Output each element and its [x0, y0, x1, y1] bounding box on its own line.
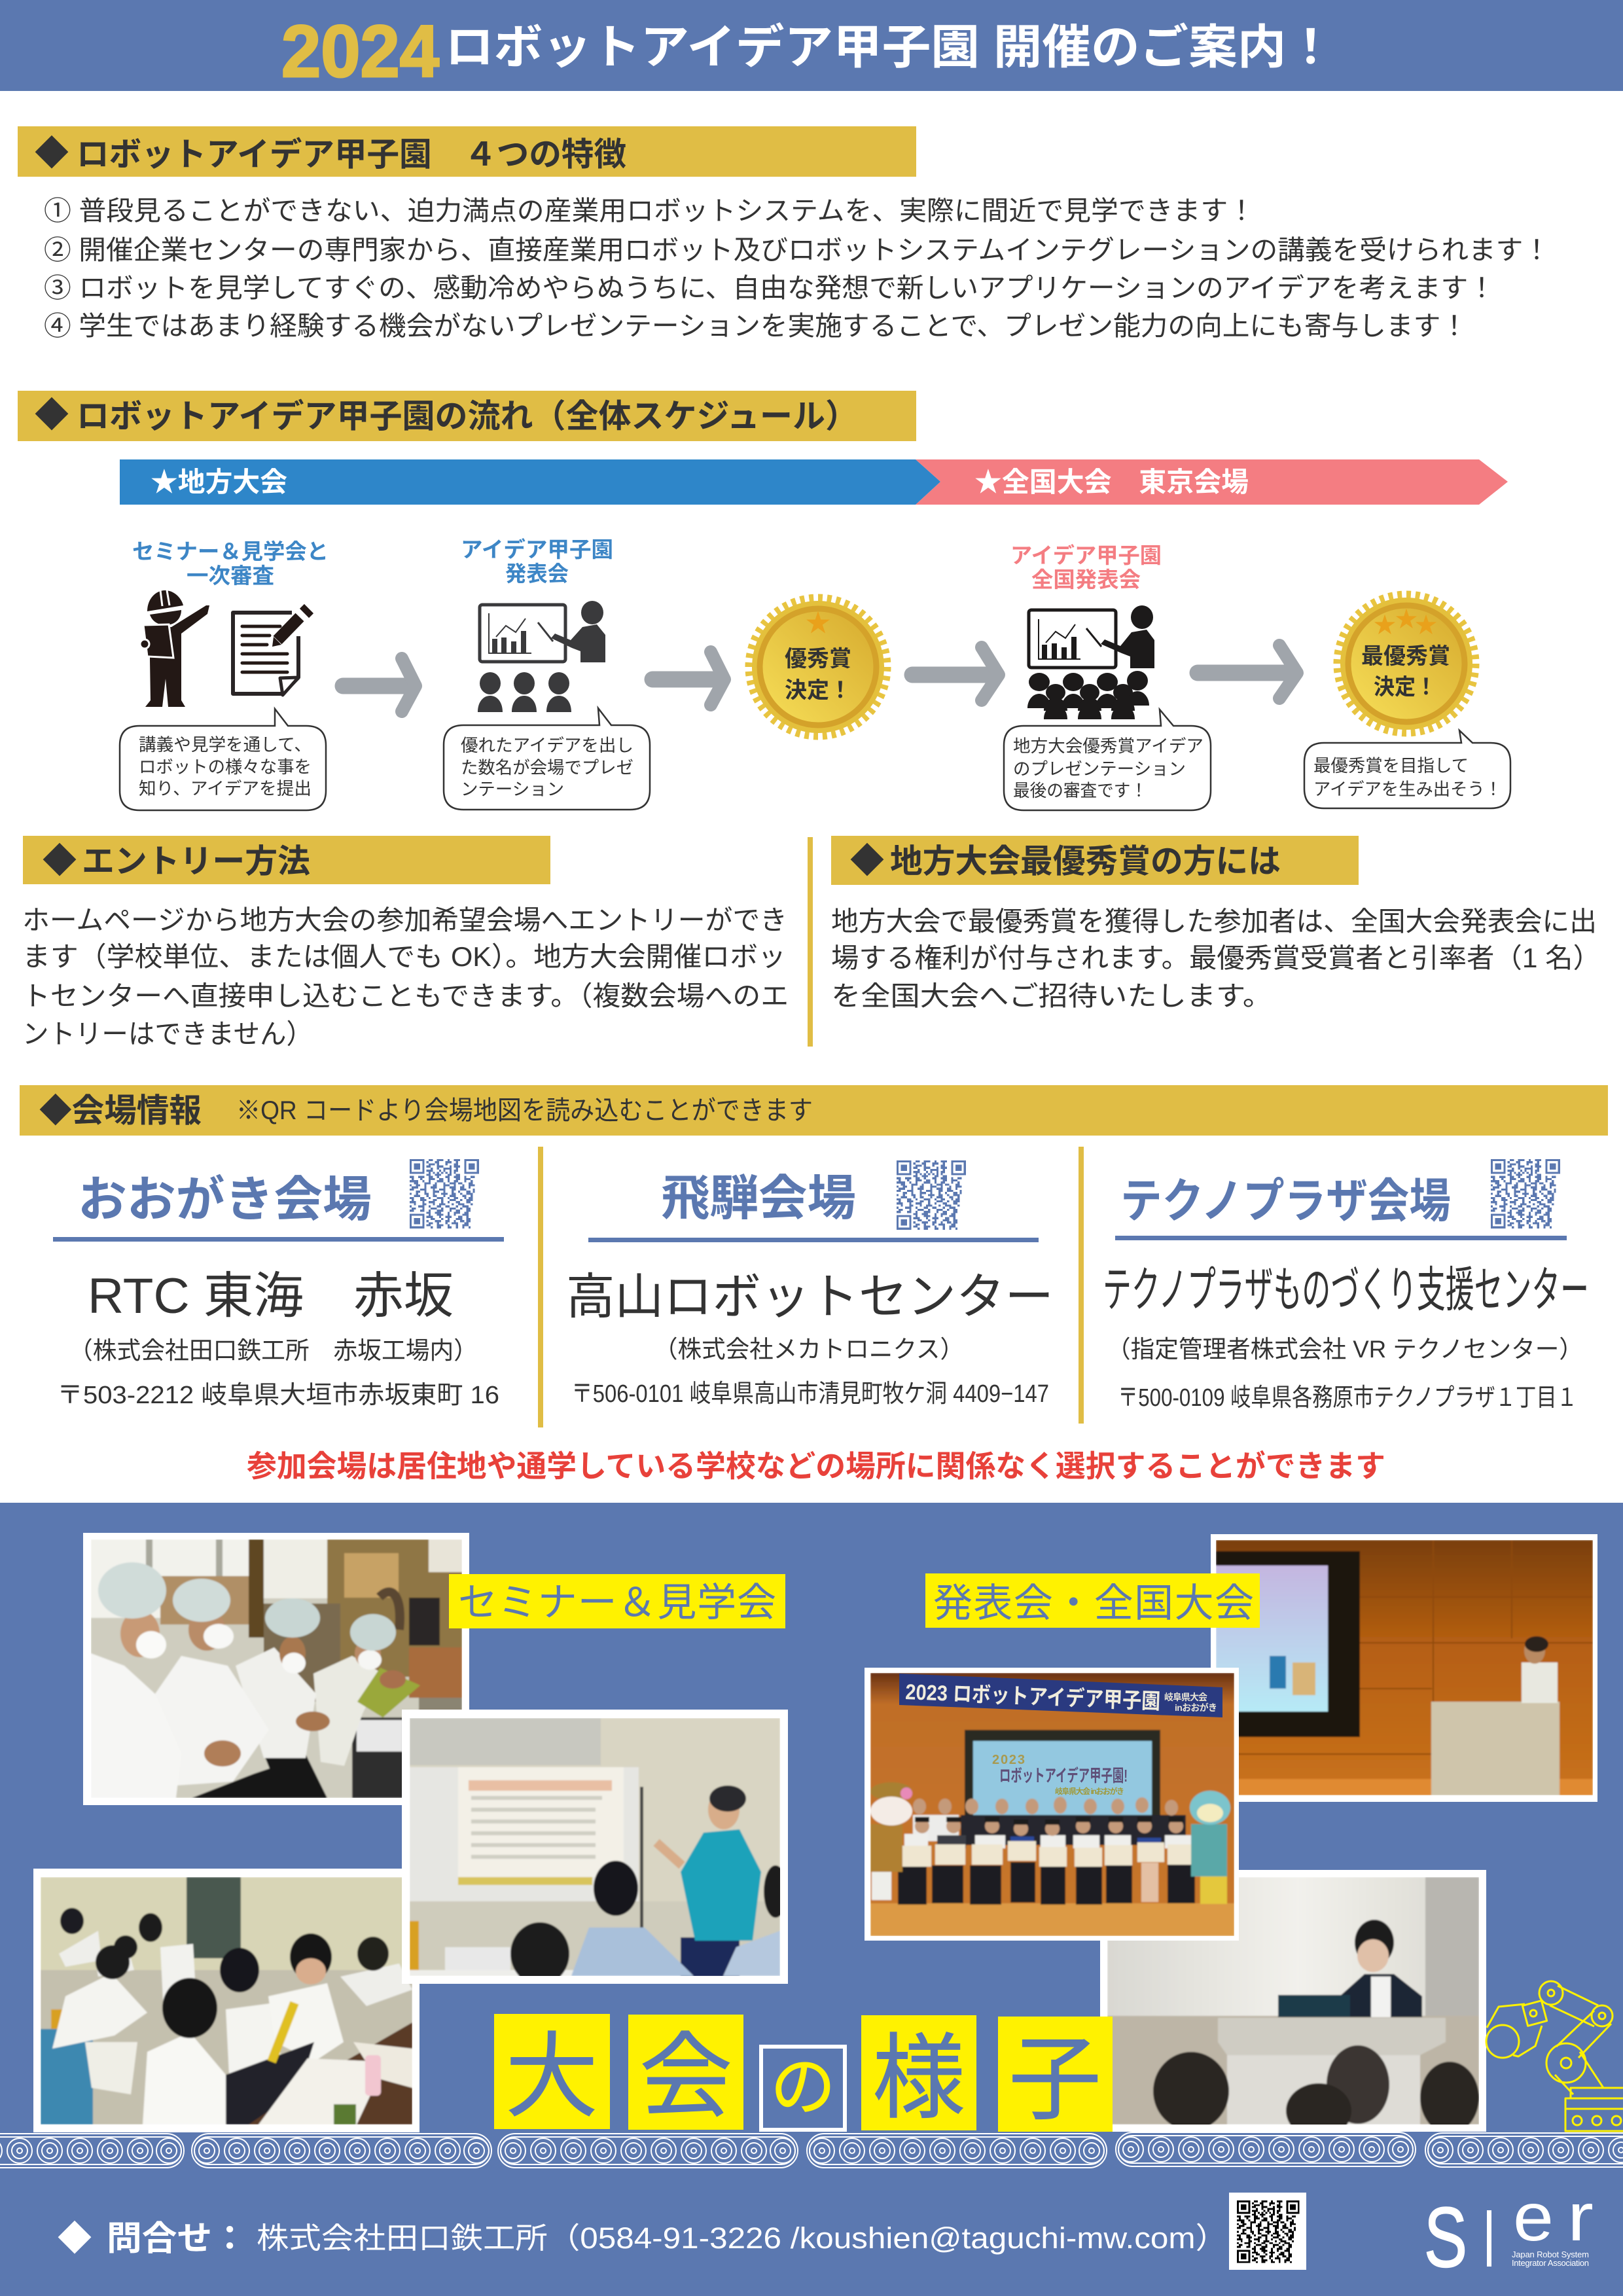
text: how to enter — [22, 905, 789, 1049]
heading: regional top prize — [831, 836, 1359, 885]
text: regional top prize — [831, 906, 1601, 1011]
back row — [961, 1815, 1186, 1845]
venue: Techno Plaza: テクノプラザ会場 — [1120, 1175, 1451, 1228]
step 2 label: アイデア甲子園 — [461, 537, 613, 562]
timeline arrow: regional: ★地方大会 — [151, 467, 287, 497]
photo: award group: 岐阜県大会 — [1164, 1692, 1207, 1702]
text: regional top prize: を全国大会へご招待いたします。 — [831, 980, 1272, 1011]
icon: worker in helmet — [140, 590, 209, 707]
medal: top award: ★ — [1415, 613, 1437, 638]
speech bubble 4: アイデアを生み出そう！ — [1313, 780, 1502, 799]
title character 2: 会 — [639, 2025, 732, 2129]
medal: top award: 決定！ — [1374, 675, 1436, 700]
text: how to enter: ホームページから地方大会の参加希望会場へエントリーができ — [22, 905, 787, 935]
photo: award group: 岐阜県大会 inおおがき — [1055, 1786, 1124, 1796]
legs and chairs — [898, 1862, 1195, 1905]
photo: stage speech — [1211, 1534, 1597, 1802]
heading: venue information: ※QR コードより会場地図を読み込むことができます — [236, 1096, 813, 1125]
title banner — [0, 0, 1623, 92]
speech bubble 3: 最後の審査です！ — [1013, 781, 1147, 800]
title banner: ロボットアイデア甲子園 開催のご案内！ — [445, 22, 1335, 74]
QR code: Techno Plaza — [1491, 1160, 1559, 1227]
step 1: seminar — [120, 539, 329, 810]
logo: SIer: e — [1513, 2179, 1554, 2255]
heading: schedule: ◆ — [35, 397, 69, 435]
photo: award group — [865, 1668, 1239, 1941]
medal: excellence award: ★ — [806, 610, 830, 637]
text: regional top prize: 地方大会で最優秀賞を獲得した参加者は、全国大会発表会に出 — [831, 906, 1597, 937]
title character 3: の — [770, 2051, 836, 2124]
photo: students in helmets — [83, 1533, 469, 1805]
front row — [904, 1834, 1192, 1848]
contact: 問合せ： — [107, 2220, 247, 2258]
heading: schedule: ロボットアイデア甲子園の流れ（全体スケジュール） — [77, 398, 858, 435]
text block: feature list: ① 普段見ることができない、迫力満点の産業用ロボットシステムを、実際に間近で見学できます！ — [44, 196, 1255, 226]
contact — [58, 2220, 1228, 2258]
heading: venue information: ◆会場情報 — [39, 1092, 202, 1129]
contact: 株式会社田口鉄工所（0584-91-3226 /koushien@taguchi-mw.com） — [257, 2221, 1228, 2255]
callout: free venue choice: 参加会場は居住地や通学している学校などの場所に関係なく選択することができます — [247, 1449, 1385, 1483]
speech bubble 2: ンテーション — [461, 780, 564, 799]
text: how to enter: ます（学校単位、または個人でも OK）。地方大会開催ロボッ — [22, 941, 786, 972]
title character 4: 様 — [872, 2026, 965, 2130]
timeline arrow: national: ★全国大会 東京会場 — [974, 467, 1249, 497]
panel: regional top prize — [831, 836, 1601, 1011]
venue: Techno Plaza — [1103, 1160, 1589, 1412]
heading: schedule — [18, 391, 916, 441]
icon: presenter with board — [480, 601, 605, 662]
speech bubble 3 — [1004, 709, 1211, 810]
arrow 1 — [343, 658, 416, 711]
step 1 label — [132, 539, 329, 588]
arrow 2 — [652, 652, 724, 705]
text block: feature list: ④ 学生ではあまり経験する機会がないプレゼンテーションを実施することで、プレゼン能力の向上にも寄与します！ — [44, 311, 1468, 341]
venue: Hida: 高山ロボットセンター — [566, 1269, 1054, 1324]
medal: top award: ★ — [1395, 607, 1418, 632]
medal: excellence award: 優秀賞 — [785, 647, 851, 672]
step 2 label — [461, 537, 613, 586]
conveyor belt — [0, 2132, 1623, 2168]
photo: students working — [33, 1869, 419, 2132]
medal: top award — [1338, 595, 1475, 732]
heading: regional top prize: 地方大会最優秀賞の方には — [890, 843, 1281, 880]
title: scene of the event — [494, 2014, 1113, 2132]
arrow 4 — [1198, 645, 1297, 698]
QR code: Hida — [897, 1162, 965, 1229]
speech bubble 3: 地方大会優秀賞アイデア — [1013, 736, 1204, 756]
title character 3 — [761, 2047, 845, 2130]
step 2 label: 発表会 — [505, 562, 569, 586]
QR code: contact — [1229, 2193, 1306, 2270]
medal: top award: ★ — [1374, 613, 1396, 638]
QR code: Ogaki — [410, 1160, 478, 1227]
speech bubble 1: 知り、アイデアを提出 — [139, 779, 312, 798]
step 3: national presentation — [1004, 543, 1211, 810]
venue: Ogaki: RTC 東海 赤坂 — [88, 1268, 454, 1324]
logo: SIer: Integrator Association — [1512, 2258, 1589, 2268]
icon: document and pencil — [233, 609, 309, 695]
venue: Techno Plaza: （指定管理者株式会社 VR テクノセンター） — [1107, 1336, 1583, 1363]
icon: robot arm — [1486, 1981, 1623, 2131]
arrow 3 — [912, 647, 999, 700]
logo: SIer: Japan Robot System — [1512, 2250, 1589, 2259]
speech bubble 3: のプレゼンテーション — [1013, 759, 1186, 779]
text: regional top prize: 場する権利が付与されます。最優秀賞受賞者と引率者（1 名） — [831, 942, 1601, 973]
icon: presenter with board — [1029, 605, 1154, 668]
text: how to enter: ントリーはできません） — [22, 1018, 313, 1049]
step 2: presentation — [444, 537, 650, 810]
photo: award group: 2023 ロボットアイデア甲子園 — [905, 1679, 1161, 1713]
venue: Hida: （株式会社メカトロニクス） — [654, 1336, 964, 1363]
logo: SIer — [1424, 2179, 1594, 2285]
speech bubble 4: 最優秀賞を目指して — [1313, 756, 1469, 776]
step 3 label: 全国発表会 — [1031, 567, 1141, 592]
heading: four features — [18, 126, 916, 177]
right mascot — [1191, 1824, 1227, 1876]
banner: seminar and tour: セミナー＆見学会 — [458, 1581, 776, 1624]
step 1 label: 一次審査 — [187, 564, 274, 588]
medal: top award: 最優秀賞 — [1361, 644, 1450, 669]
venue: Ogaki: おおがき会場 — [78, 1172, 372, 1227]
heading: four features: ロボットアイデア甲子園 ４つの特徴 — [77, 136, 626, 173]
timeline arrow: regional — [120, 459, 940, 505]
speech bubble 1: 講義や見学を通して、 — [139, 735, 312, 755]
photo: speaker at lectern — [1100, 1870, 1486, 2138]
heading: venue information — [20, 1085, 1608, 1136]
logo: SIer: r — [1567, 2179, 1594, 2255]
timeline arrow: national — [916, 459, 1508, 505]
venue: Ogaki — [53, 1160, 504, 1409]
text: how to enter: トセンターへ直接申し込むこともできます。（複数会場へのエ — [22, 980, 789, 1011]
venue: Ogaki: 〒503-2212 岐阜県大垣市赤坂東町 16 — [57, 1382, 499, 1409]
photo: award group: ロボットアイデア甲子園! — [999, 1766, 1128, 1785]
venue: Ogaki: （株式会社田口鉄工所 赤坂工場内） — [69, 1337, 478, 1364]
panel: how to enter — [22, 836, 789, 1049]
left mascot — [870, 1824, 902, 1872]
photo: award group: 2023 — [992, 1753, 1025, 1767]
text block: feature list: ② 開催企業センターの専門家から、直接産業用ロボット及びロボットシステムインテグレーションの講義を受けられます！ — [44, 235, 1550, 265]
banner: presentation and national: 発表会・全国大会 — [933, 1581, 1254, 1625]
step 1 label: セミナー＆見学会と — [132, 539, 329, 564]
step 3 label: アイデア甲子園 — [1010, 543, 1162, 567]
heading: regional top prize: ◆ — [850, 842, 884, 880]
speech bubble 1: ロボットの様々な事を — [139, 757, 312, 777]
text block: feature list — [44, 196, 1550, 341]
heading: how to enter: エントリー方法 — [82, 843, 310, 880]
photo: award group: inおおがき — [1175, 1702, 1217, 1713]
heading: how to enter: ◆ — [43, 842, 77, 880]
title character 1: 大 — [505, 2025, 598, 2129]
title character 5: 子 — [1008, 2028, 1101, 2132]
venue: Hida: 〒506-0101 岐阜県高山市清見町牧ケ洞 4409−147 — [571, 1380, 1049, 1408]
photo: lecture — [402, 1710, 788, 1985]
text block: feature list: ③ ロボットを見学してすぐの、感動冷めやらぬうちに、自由な発想で新しいアプリケーションのアイデアを考えます！ — [44, 273, 1495, 303]
title banner: 2024 — [281, 10, 439, 92]
speech bubble 2: 優れたアイデアを出し — [461, 736, 633, 755]
heading: four features: ◆ — [35, 135, 69, 173]
step 3 label — [1010, 543, 1162, 592]
speech bubble 4 — [1304, 730, 1510, 808]
speech bubble 2: た数名が会場でプレゼ — [461, 758, 633, 778]
speech bubble 2 — [444, 708, 650, 810]
medal: excellence award — [749, 598, 887, 736]
venue: Hida: 飛騨会場 — [661, 1171, 856, 1225]
medal: excellence award: 決定！ — [785, 678, 851, 703]
logo: SIer: S — [1424, 2189, 1467, 2285]
icon: audience of three — [478, 672, 571, 712]
icon: large audience — [1027, 671, 1149, 719]
speech bubble 1 — [120, 709, 326, 810]
venue: Hida — [566, 1162, 1054, 1408]
contact: ◆ — [58, 2220, 92, 2258]
heading: how to enter — [23, 836, 550, 884]
